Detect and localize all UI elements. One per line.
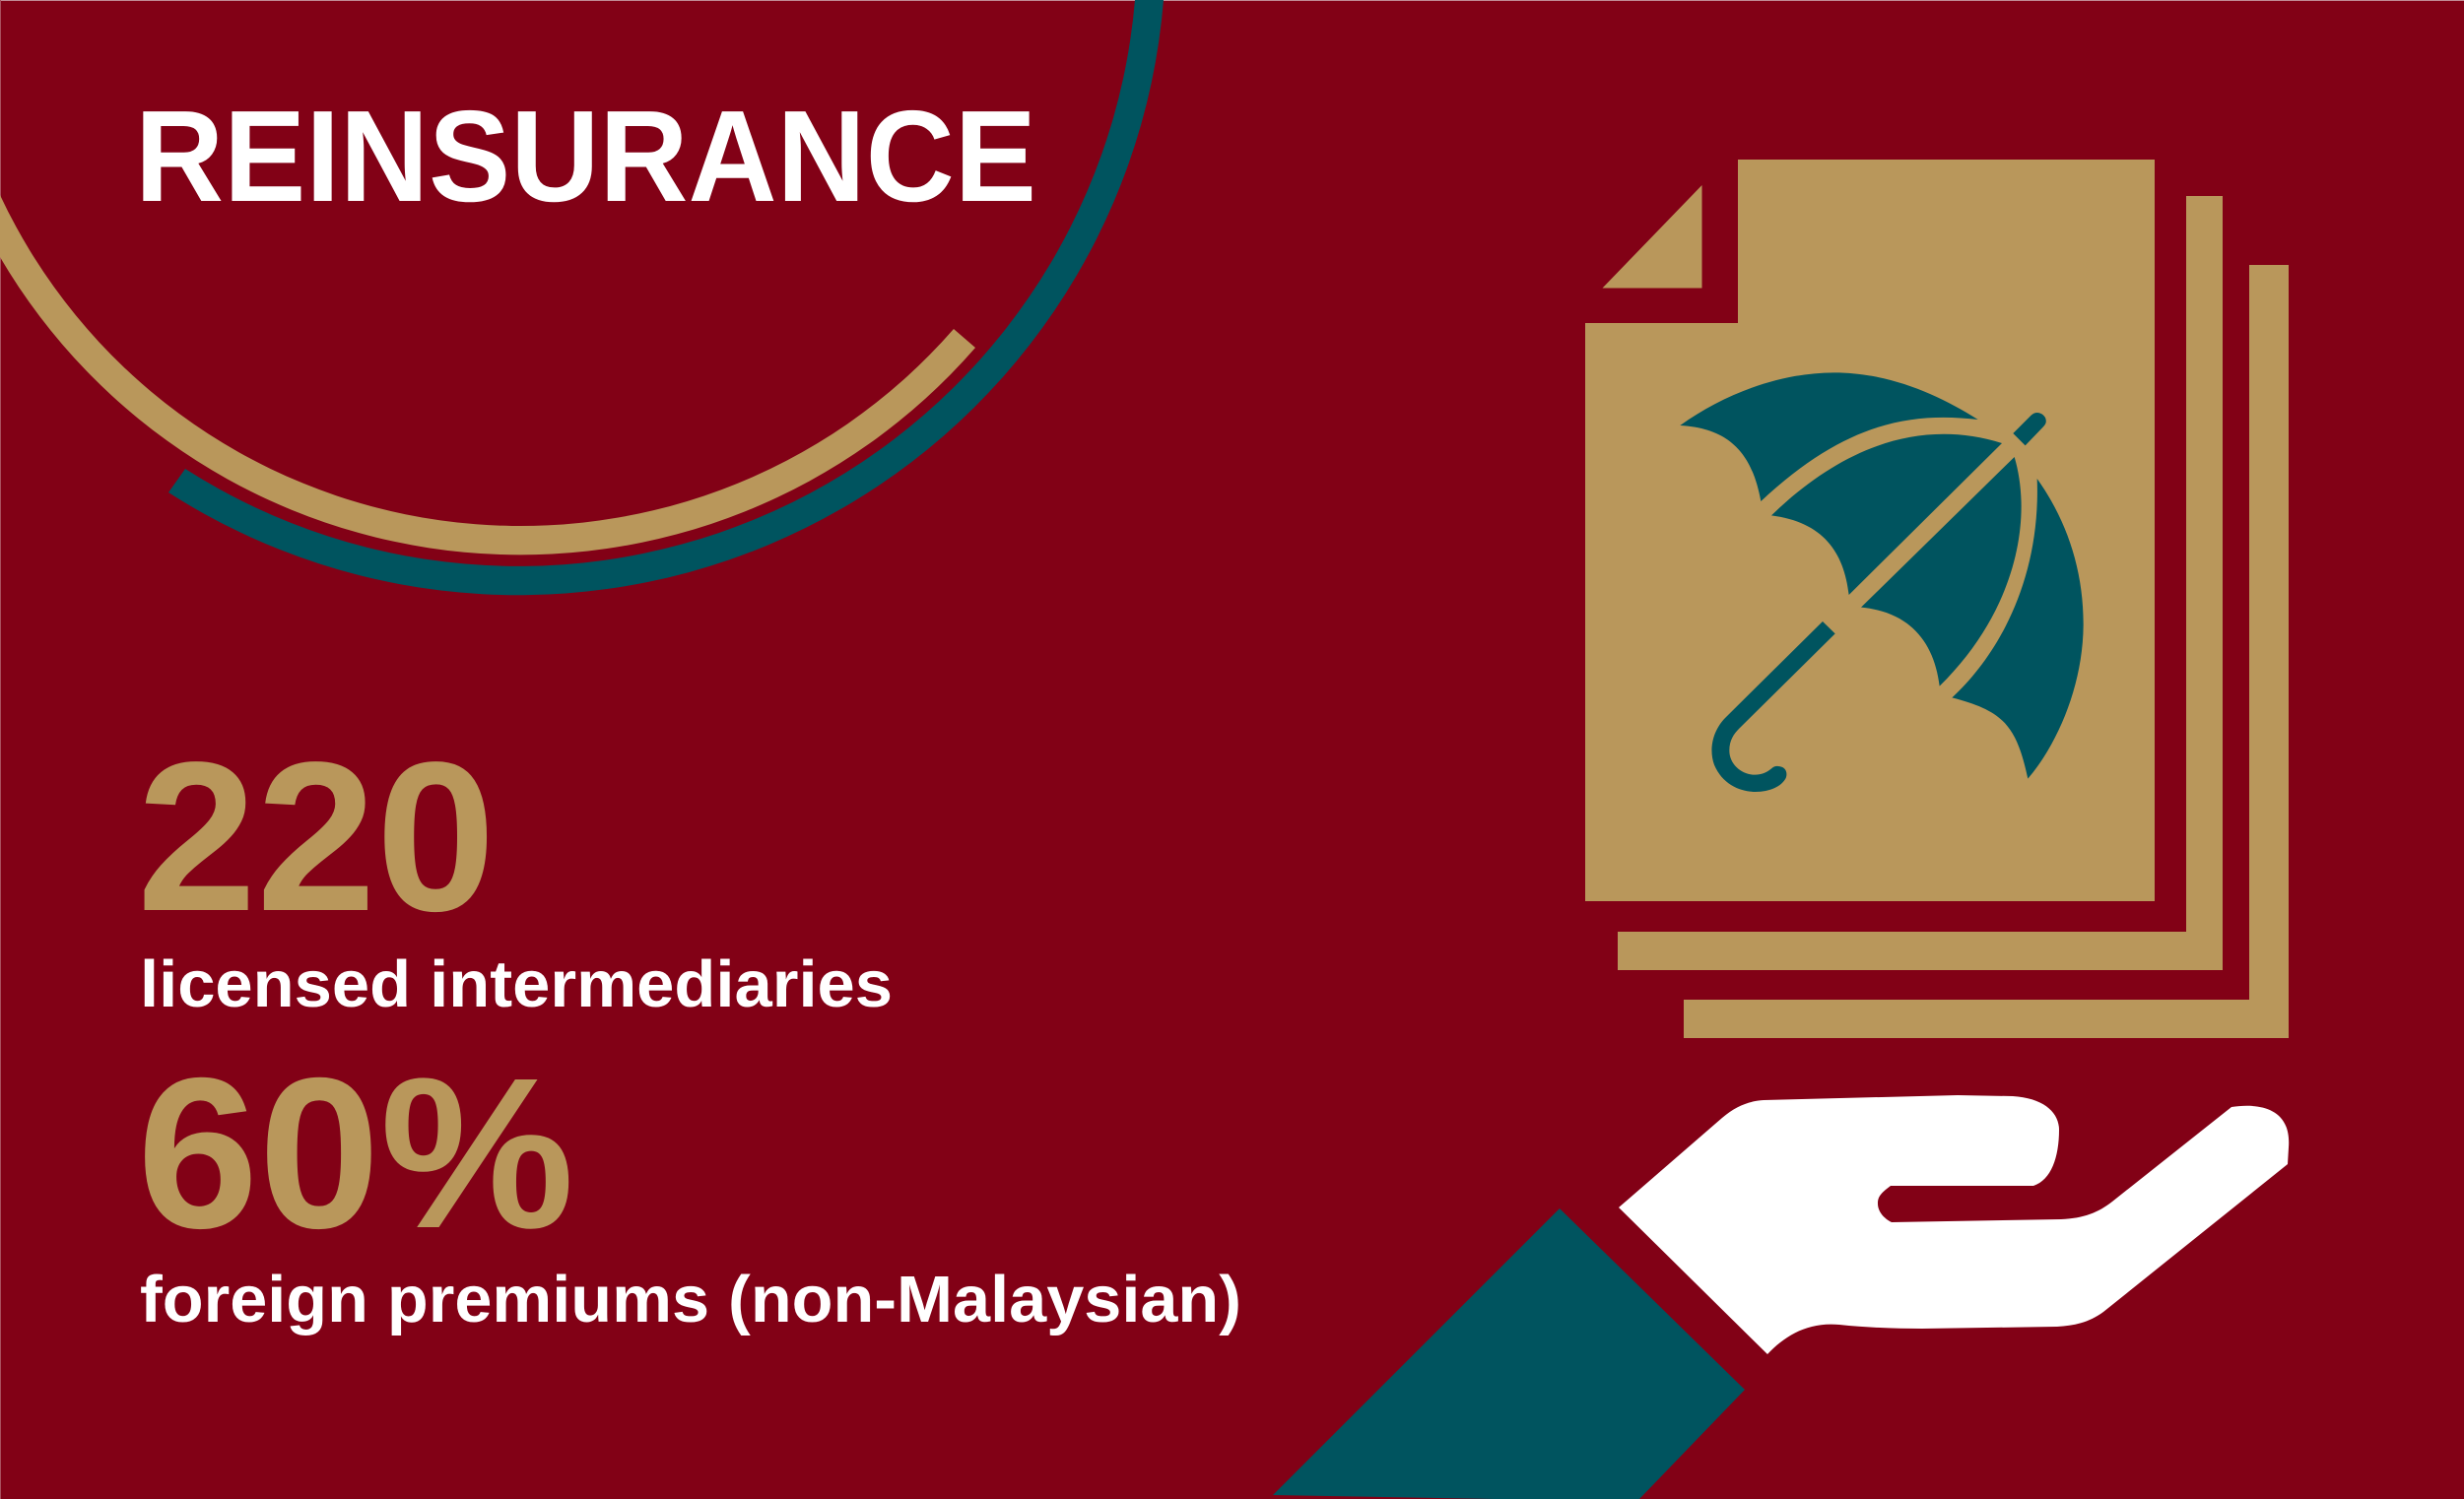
umbrella handle [1711, 621, 1835, 792]
icon: umbrella [1680, 372, 2084, 792]
icon: sleeve [1273, 1208, 1745, 1499]
stat number: 60%: 60% [137, 1034, 574, 1273]
umbrella panel 4 [1952, 479, 2084, 779]
back page edge [1684, 265, 2289, 1038]
title: REINSURANCE [135, 84, 1036, 228]
stat: 60% foreign premiums [137, 1034, 1241, 1336]
icon: open hand [1619, 1095, 2289, 1354]
umbrella tip [2013, 413, 2046, 445]
front page [1585, 160, 2155, 901]
icon: document stack [1585, 160, 2289, 1038]
umbrella panel 1 [1680, 372, 1978, 501]
stat label: licensed intermediaries: licensed intermediaries [140, 947, 893, 1021]
stat number: 220: 220 [137, 717, 496, 955]
decorative teal arc [168, 0, 1164, 595]
stat: 220 licensed intermediaries [137, 717, 893, 1021]
umbrella panel 2 [1771, 434, 2002, 595]
folded corner [1602, 185, 1702, 288]
umbrella panel 3 [1861, 457, 2022, 686]
decorative gold arc [0, 195, 975, 554]
stat label: foreign premiums: foreign premiums (non-Malaysian) [140, 1263, 1241, 1336]
middle page edge [1618, 196, 2223, 970]
